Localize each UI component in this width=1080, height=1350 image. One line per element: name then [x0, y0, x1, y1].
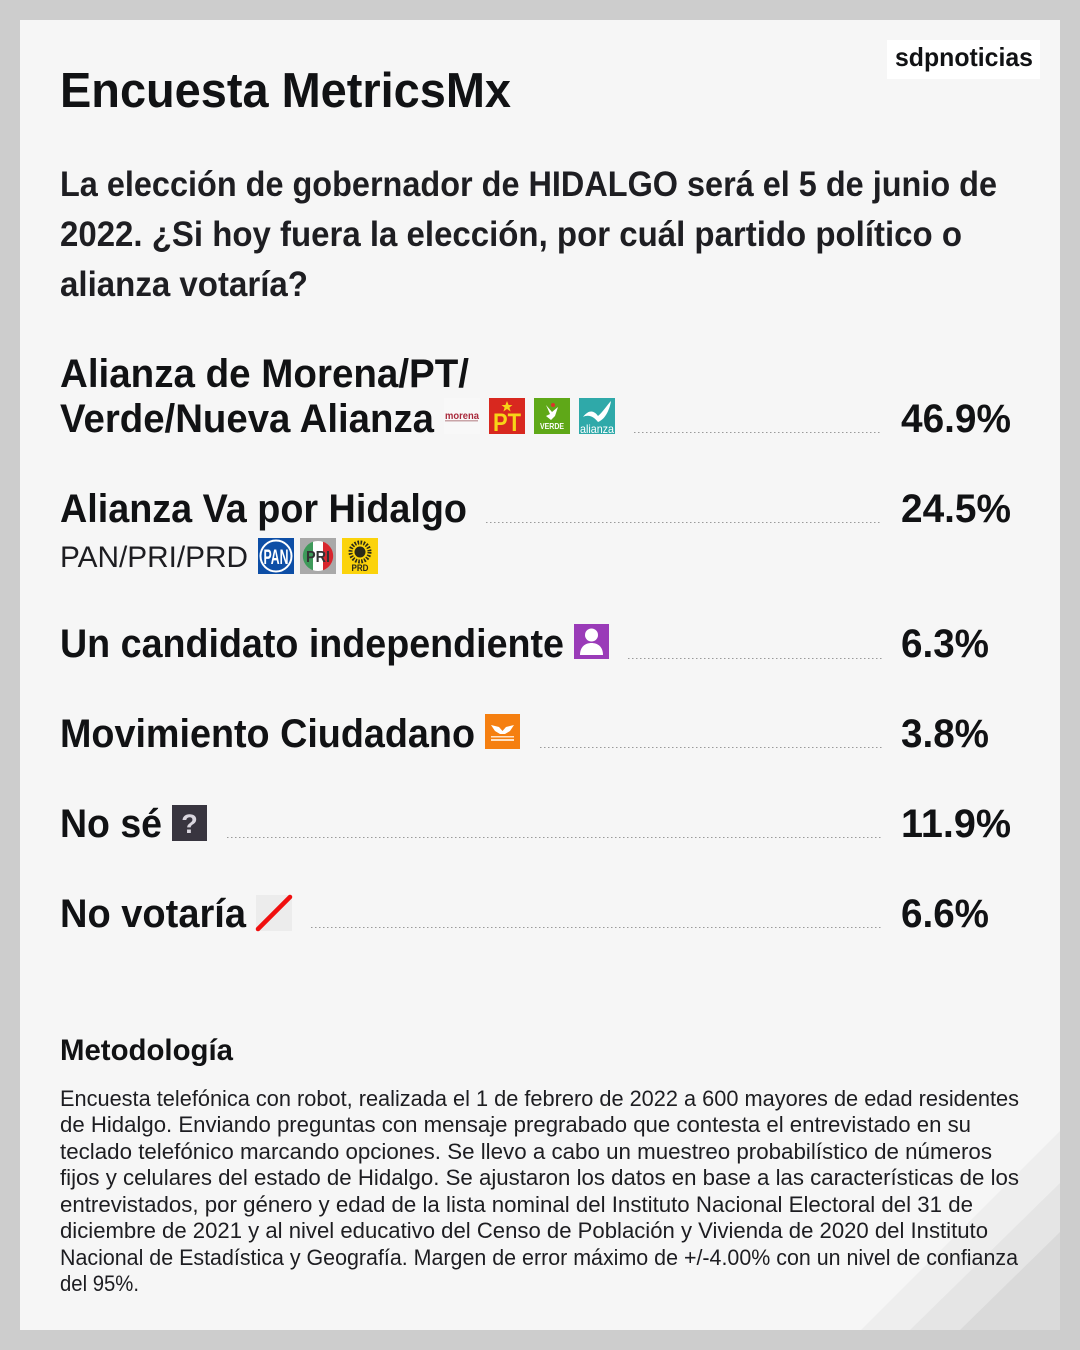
methodology text — [60, 1086, 1019, 1296]
icon: PAN: PAN — [264, 546, 288, 569]
icon: Verde — [534, 398, 570, 434]
row: Alianza Va por Hidalgo: 24.5% — [901, 487, 1011, 531]
row: No sé — [60, 802, 1011, 846]
row: No sé: 11.9% — [901, 802, 1011, 846]
question text: 2022. ¿Si hoy fuera la elección, por cuál partido político o — [60, 215, 962, 254]
row: Un candidato independiente: 6.3% — [901, 622, 989, 666]
row: Movimiento Ciudadano: 3.8% — [901, 712, 989, 756]
icon: person — [574, 624, 609, 659]
icon: PAN — [258, 538, 294, 574]
icon: Movimiento Ciudadano eagle — [485, 714, 520, 749]
title: Encuesta MetricsMx — [60, 64, 511, 118]
icon: Verde: VERDE — [540, 422, 565, 431]
methodology text: teclado telefónico marcando opciones. Se llevo a cabo un muestreo probabilístico de números — [60, 1139, 992, 1164]
corner watermark stripes — [861, 1131, 1060, 1330]
logo: sdpnoticias: sdpnoticias — [895, 42, 1033, 72]
methodology text: diciembre de 2021 y al nivel educativo del Censo de Población y Vivienda de 2020 del Instituto — [60, 1218, 988, 1243]
methodology text: entrevistados, por género y edad de la lista nominal del Instituto Nacional Electoral del 31 de — [60, 1192, 973, 1217]
icon: question mark — [172, 805, 207, 841]
row: No sé: No sé — [60, 802, 162, 846]
row: Movimiento Ciudadano: Movimiento Ciudadano — [60, 712, 475, 756]
row: No votaría: No votaría — [60, 892, 247, 936]
row: Un candidato independiente: Un candidato independiente — [60, 622, 564, 666]
icon: PT — [489, 398, 525, 437]
row: Movimiento Ciudadano — [60, 712, 989, 756]
icon: question mark: ? — [181, 809, 198, 839]
icon: red slash — [256, 895, 292, 931]
row: Alianza Va por Hidalgo: PAN/PRI/PRD — [60, 541, 248, 574]
row: Alianza de Morena/PT/Verde/Nueva Alianza: Alianza de Morena/PT/ — [60, 352, 469, 396]
row: No votaría — [60, 892, 989, 936]
icon: PRD — [342, 538, 378, 574]
row: No votaría: 6.6% — [901, 892, 989, 936]
methodology text: de Hidalgo. Enviando preguntas con mensaje pregrabado que contesta el entrevistado en su — [60, 1112, 971, 1137]
icon: Nueva Alianza — [579, 398, 615, 436]
question text: La elección de gobernador de HIDALGO será el 5 de junio de — [60, 165, 997, 204]
row: Alianza de Morena/PT/Verde/Nueva Alianza — [60, 352, 1011, 441]
icon: PRD: PRD — [352, 563, 369, 573]
row: Un candidato independiente — [60, 622, 989, 666]
methodology heading: Metodología — [60, 1034, 233, 1067]
row: Alianza Va por Hidalgo — [60, 487, 1011, 574]
icon: Nueva Alianza: alianza — [580, 422, 614, 436]
methodology text: del 95%. — [60, 1271, 139, 1296]
icon: morena: morena — [445, 410, 479, 422]
methodology text: Encuesta telefónica con robot, realizada el 1 de febrero de 2022 a 600 mayores de edad residentes — [60, 1086, 1019, 1111]
row: Alianza de Morena/PT/Verde/Nueva Alianza: 46.9% — [901, 397, 1011, 441]
icon: PT: PT — [493, 409, 521, 437]
question text — [60, 165, 997, 304]
methodology text: Nacional de Estadística y Geografía. Margen de error máximo de +/-4.00% con un nivel de confianza — [60, 1245, 1019, 1270]
row: Alianza Va por Hidalgo: Alianza Va por Hidalgo — [60, 487, 467, 531]
icon: PRI — [300, 538, 336, 574]
question text: alianza votaría? — [60, 265, 308, 304]
methodology text: fijos y celulares del estado de Hidalgo. Se ajustaron los datos en base a las características de los — [60, 1165, 1019, 1190]
row: Alianza de Morena/PT/Verde/Nueva Alianza: Verde/Nueva Alianza — [60, 397, 435, 441]
icon: PRI: PRI — [306, 549, 330, 566]
icon: morena — [444, 398, 480, 434]
